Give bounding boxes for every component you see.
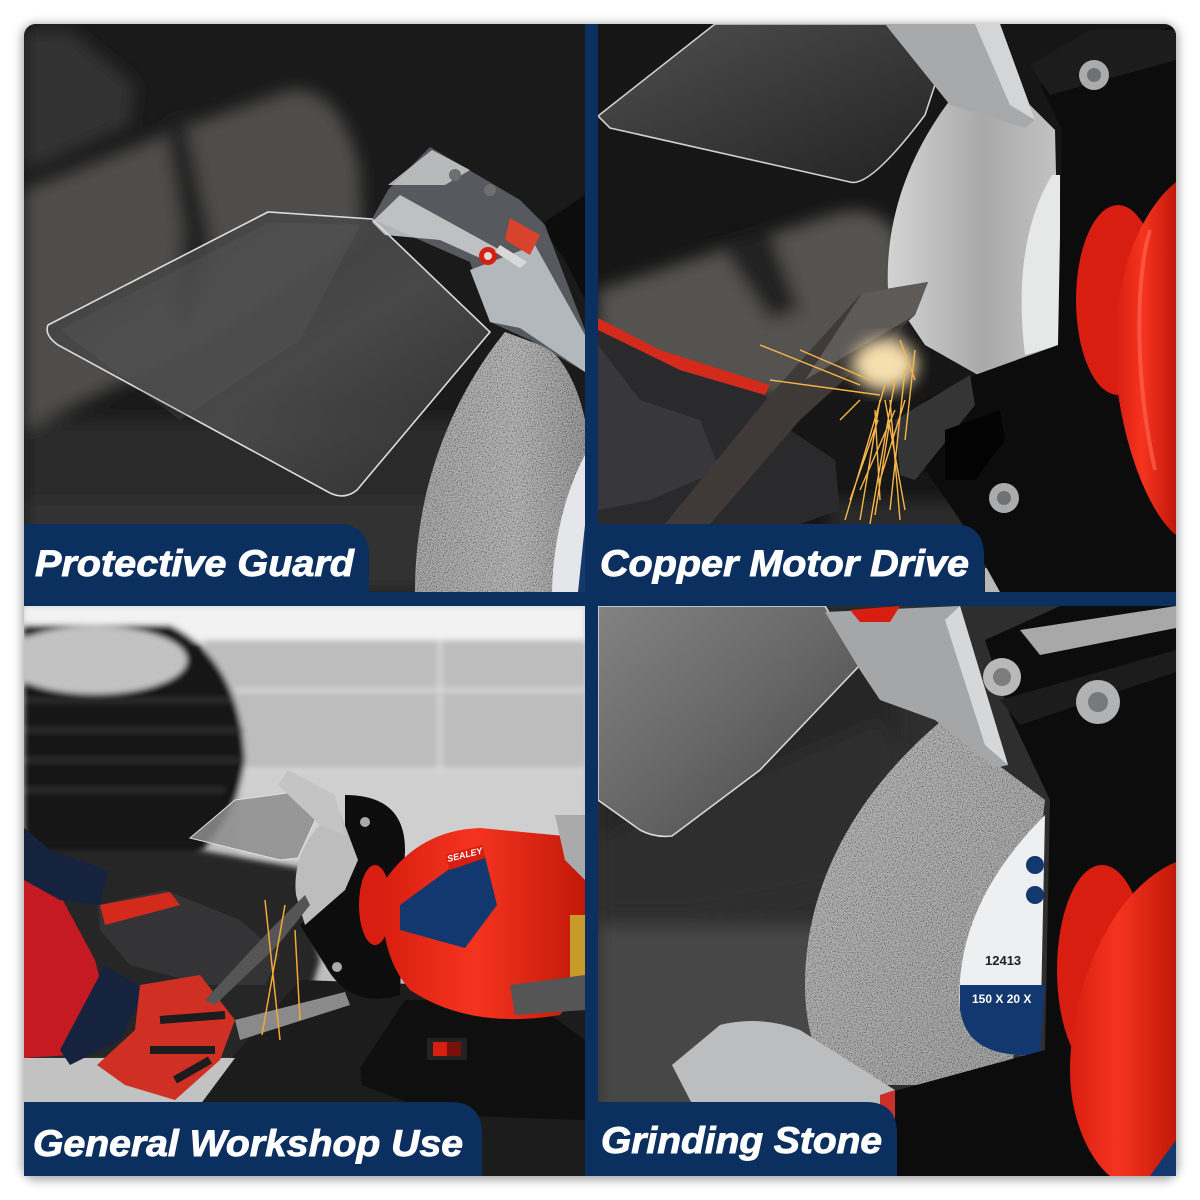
chisel and tools xyxy=(205,895,350,1040)
red motor body xyxy=(359,815,585,1019)
clear guard xyxy=(47,212,490,496)
panel: copper motor drive photo xyxy=(598,24,1176,592)
floor patch xyxy=(985,568,1000,592)
panel: grinding stone photo xyxy=(598,606,1176,1176)
black machine housing xyxy=(895,24,1176,592)
clear guard and bracket xyxy=(598,24,1035,182)
blurred background hose xyxy=(24,26,452,592)
gloved hand xyxy=(598,318,840,524)
red motor body: SEALEY xyxy=(446,845,484,864)
black bench xyxy=(202,980,585,1176)
clear guard and bracket xyxy=(598,606,1008,836)
grey wheel and black hub xyxy=(295,795,405,999)
black housing xyxy=(880,606,1176,1176)
grinding stone: 12413 xyxy=(985,953,1021,968)
metal bracket xyxy=(372,147,585,372)
label: General Workshop Use xyxy=(24,1102,482,1176)
grinding stone: 150 X 20 X xyxy=(972,992,1031,1006)
clear guard and bracket xyxy=(190,770,345,860)
label: General Workshop Use: General Workshop Use xyxy=(33,1123,463,1164)
red jacket arms xyxy=(24,828,145,1065)
black housing xyxy=(540,195,585,300)
metal tool rest xyxy=(672,1021,895,1120)
red motor cover xyxy=(1076,182,1176,535)
gloved hands xyxy=(97,890,280,1100)
grinder base xyxy=(360,1000,585,1120)
blurred wall blocks and tyre xyxy=(3,606,585,862)
blurred background xyxy=(598,703,889,1102)
sparks xyxy=(760,339,917,524)
grinding stone xyxy=(415,332,585,592)
label: Protective Guard xyxy=(24,524,369,592)
dark clutter behind hands xyxy=(24,850,320,1062)
grinding stone xyxy=(805,722,1045,1085)
label: Protective Guard: Protective Guard xyxy=(35,543,355,584)
label: Copper Motor Drive: Copper Motor Drive xyxy=(600,543,969,584)
panel: general workshop use photo xyxy=(3,606,585,1176)
white grinding wheel xyxy=(888,95,1060,375)
label: Grinding Stone: Grinding Stone xyxy=(601,1120,882,1161)
label: Grinding Stone xyxy=(598,1102,897,1176)
chisel file xyxy=(665,282,928,524)
label: Copper Motor Drive xyxy=(598,524,984,592)
red motor cover xyxy=(1057,862,1176,1176)
panel: protective guard photo xyxy=(24,24,585,592)
blurred background xyxy=(598,211,1030,592)
